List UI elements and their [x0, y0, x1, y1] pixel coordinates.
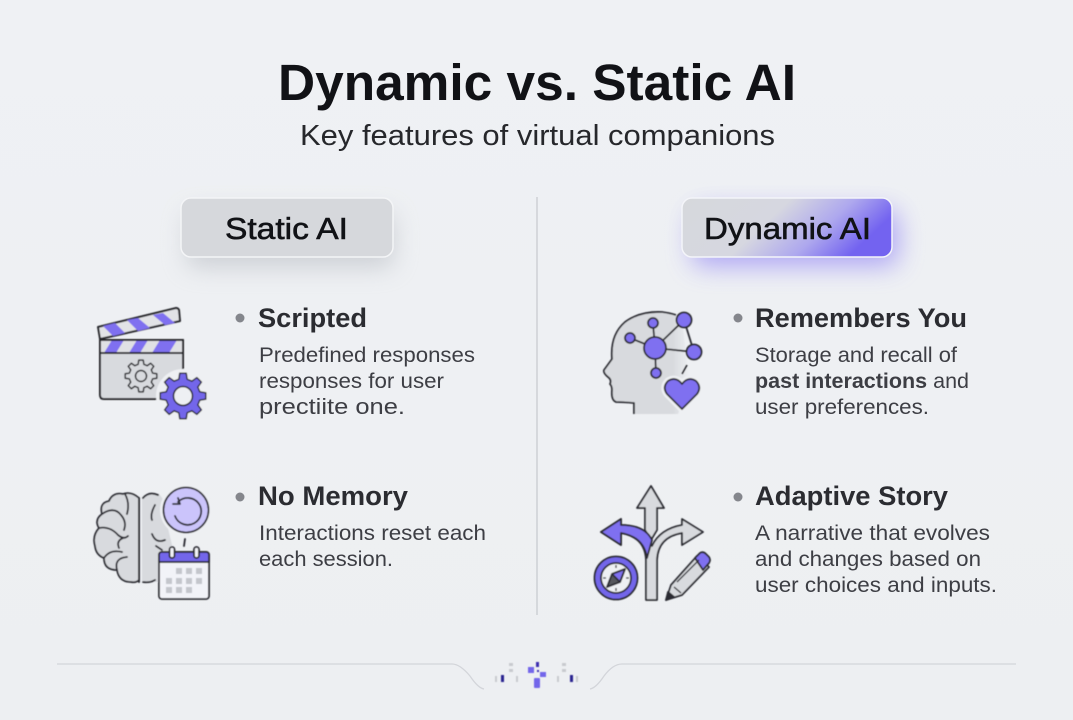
text block: No Memory: Interactions reset each: [259, 522, 486, 545]
text block: Scripted: prectiite one.: [259, 394, 405, 419]
footer line left: [57, 664, 484, 689]
text block: Remembers You: past interactions and: [755, 370, 969, 393]
badge: Dynamic AI: [682, 198, 898, 266]
text block: Adaptive Story: [734, 481, 997, 597]
text block: Scripted: Predefined responses: [259, 344, 475, 367]
badge: Static AI: [181, 198, 394, 268]
icon: head with memory network and heart: [604, 312, 702, 414]
text block: Scripted: Scripted: [258, 303, 367, 333]
icon: brain with reset and calendar: [94, 484, 212, 599]
text block: Remembers You: [734, 303, 969, 419]
subtitle: Key features of virtual companions: [300, 120, 775, 152]
footer logo mark: [495, 662, 578, 688]
text block: No Memory: No Memory: [258, 481, 408, 511]
text block: Scripted: responses for user: [259, 370, 444, 393]
text block: No Memory: each session.: [259, 548, 393, 571]
text block: Remembers You: Storage and recall of: [755, 344, 957, 367]
badge: Static AI: Static AI: [225, 211, 348, 246]
text block: Scripted: [236, 303, 475, 419]
icon: branching arrows, compass and pencil: [594, 486, 710, 600]
text block: Adaptive Story: user choices and inputs.: [755, 574, 997, 597]
badge: Dynamic AI: Dynamic AI: [704, 211, 871, 246]
text block: Remembers You: user preferences.: [755, 396, 929, 419]
text block: Adaptive Story: A narrative that evolves: [755, 522, 990, 545]
icon: clapperboard with gears: [98, 308, 210, 423]
text block: Remembers You: Remembers You: [755, 303, 967, 333]
text block: Adaptive Story: Adaptive Story: [755, 481, 948, 511]
text block: Adaptive Story: and changes based on: [755, 548, 981, 571]
footer line right: [590, 664, 1016, 689]
text block: No Memory: [236, 481, 486, 571]
title: Dynamic vs. Static AI: [278, 54, 796, 111]
